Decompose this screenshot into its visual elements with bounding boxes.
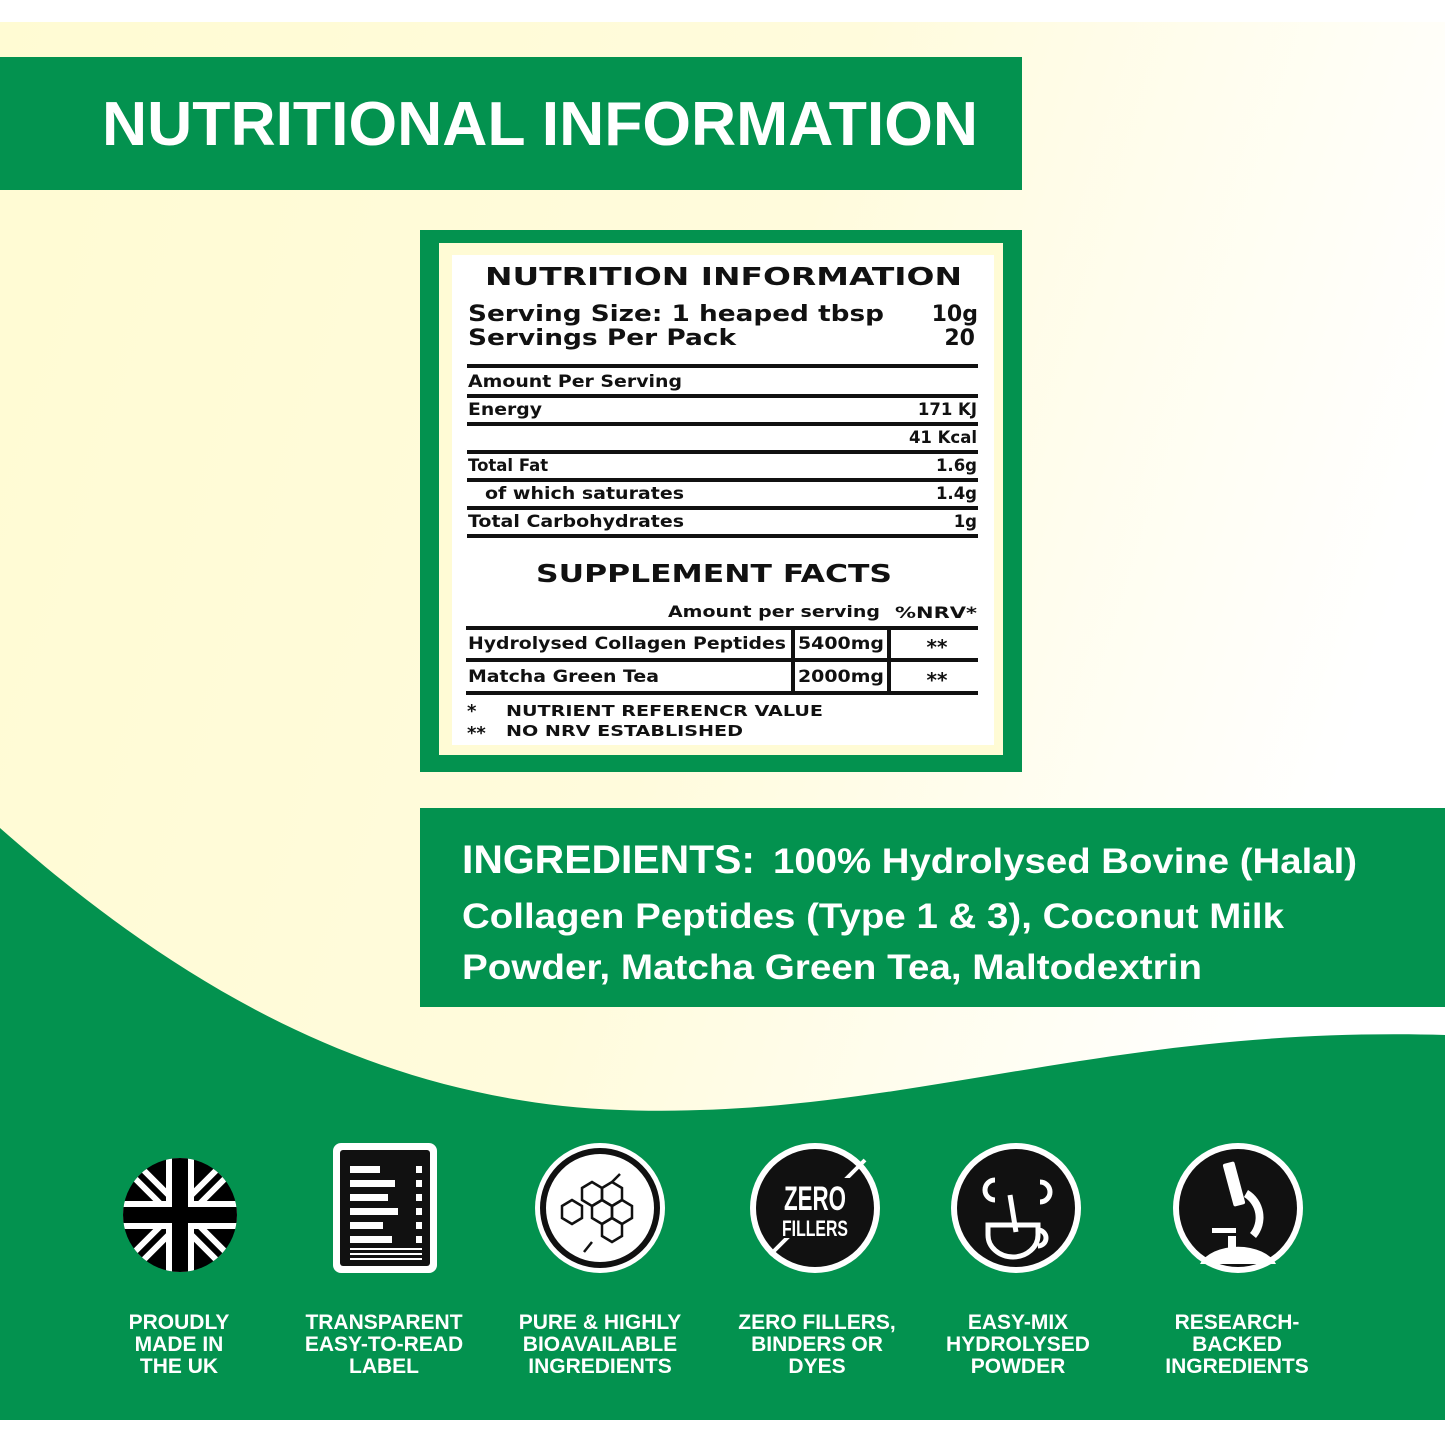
- nutrition table: 41 Kcal: [909, 428, 977, 447]
- label: made in uk: MADE IN: [135, 1333, 223, 1356]
- icon: UK flag: [120, 1155, 240, 1275]
- title bar: [0, 57, 1022, 190]
- supplement table: **: [927, 668, 948, 692]
- green wave background: [0, 828, 1445, 1420]
- supplement table: [466, 602, 978, 695]
- label: made in uk: THE UK: [140, 1355, 218, 1378]
- title bar: NUTRITIONAL INFORMATION: [102, 90, 978, 159]
- nutrition table: 1g: [954, 512, 977, 531]
- nutrition table: 171 KJ: [918, 400, 977, 419]
- feature labels: [129, 1311, 1309, 1378]
- label: zero fillers: ZERO FILLERS,: [738, 1311, 896, 1334]
- label: research: RESEARCH-: [1175, 1311, 1299, 1334]
- serving info: Serving Size: 1 heaped tbsp: [468, 302, 884, 327]
- label: zero fillers: BINDERS OR: [751, 1333, 883, 1356]
- footnotes: **: [467, 723, 486, 744]
- label: transparent: LABEL: [349, 1355, 419, 1378]
- serving info: Servings Per Pack: [468, 326, 738, 351]
- supplement table: Matcha Green Tea: [468, 667, 659, 686]
- panel: ingredients: [420, 808, 1445, 1007]
- nutrition table: 1.6g: [936, 456, 977, 475]
- nutrition table: Energy: [468, 400, 542, 419]
- label: pure: INGREDIENTS: [528, 1355, 672, 1378]
- label: pure: PURE & HIGHLY: [519, 1311, 681, 1334]
- icon: zero fillers: ZERO: [784, 1180, 846, 1218]
- label: made in uk: PROUDLY: [129, 1311, 229, 1334]
- supplement table: Amount per serving: [668, 602, 880, 621]
- label: research: BACKED: [1192, 1333, 1282, 1356]
- supplement table: Hydrolysed Collagen Peptides: [468, 634, 786, 653]
- label: easy-mix: EASY-MIX: [968, 1311, 1068, 1334]
- icon: label document: [333, 1143, 437, 1273]
- nutrition table: Total Carbohydrates: [468, 512, 684, 531]
- footnotes: NO NRV ESTABLISHED: [506, 722, 743, 740]
- icon: zero fillers: FILLERS: [782, 1216, 848, 1241]
- serving info: [468, 302, 978, 351]
- supplement table: 5400mg: [798, 634, 884, 653]
- panel: ingredients: INGREDIENTS:: [462, 838, 755, 882]
- nutrition table: Amount Per Serving: [468, 372, 682, 391]
- footnotes: *: [467, 701, 477, 722]
- footnotes: NUTRIENT REFERENCR VALUE: [506, 702, 823, 720]
- supplement table: %NRV*: [895, 603, 978, 622]
- icon: zero fillers: [750, 1143, 880, 1273]
- panel: nutrition label: [420, 230, 1022, 772]
- panel: ingredients: 100% Hydrolysed Bovine (Halal): [773, 842, 1357, 881]
- supplement table: **: [927, 635, 948, 659]
- label: zero fillers: DYES: [788, 1355, 846, 1378]
- nutrition table: 1.4g: [936, 484, 977, 503]
- heading: supplement facts: SUPPLEMENT FACTS: [536, 559, 892, 588]
- nutrition table: of which saturates: [485, 484, 684, 503]
- supplement table: 2000mg: [798, 667, 884, 686]
- icon: microscope: [1173, 1143, 1303, 1273]
- serving info: 20: [944, 326, 975, 351]
- panel: ingredients: Collagen Peptides (Type 1 & 3), Coconut Milk: [462, 897, 1285, 936]
- nutrition table: [467, 364, 978, 538]
- panel: ingredients: Powder, Matcha Green Tea, Maltodextrin: [462, 948, 1202, 987]
- heading: nutrition information: NUTRITION INFORMATION: [485, 262, 962, 291]
- label: transparent: TRANSPARENT: [305, 1311, 463, 1334]
- serving info: 10g: [932, 302, 978, 327]
- label: transparent: EASY-TO-READ: [305, 1333, 463, 1356]
- icon: easy-mix cup: [951, 1143, 1081, 1273]
- footnotes: [467, 701, 823, 744]
- label: easy-mix: POWDER: [971, 1355, 1065, 1378]
- icon: molecule: [535, 1143, 665, 1273]
- label: easy-mix: HYDROLYSED: [946, 1333, 1090, 1356]
- nutrition table: Total Fat: [468, 456, 548, 475]
- label: pure: BIOAVAILABLE: [523, 1333, 677, 1356]
- label: research: INGREDIENTS: [1165, 1355, 1309, 1378]
